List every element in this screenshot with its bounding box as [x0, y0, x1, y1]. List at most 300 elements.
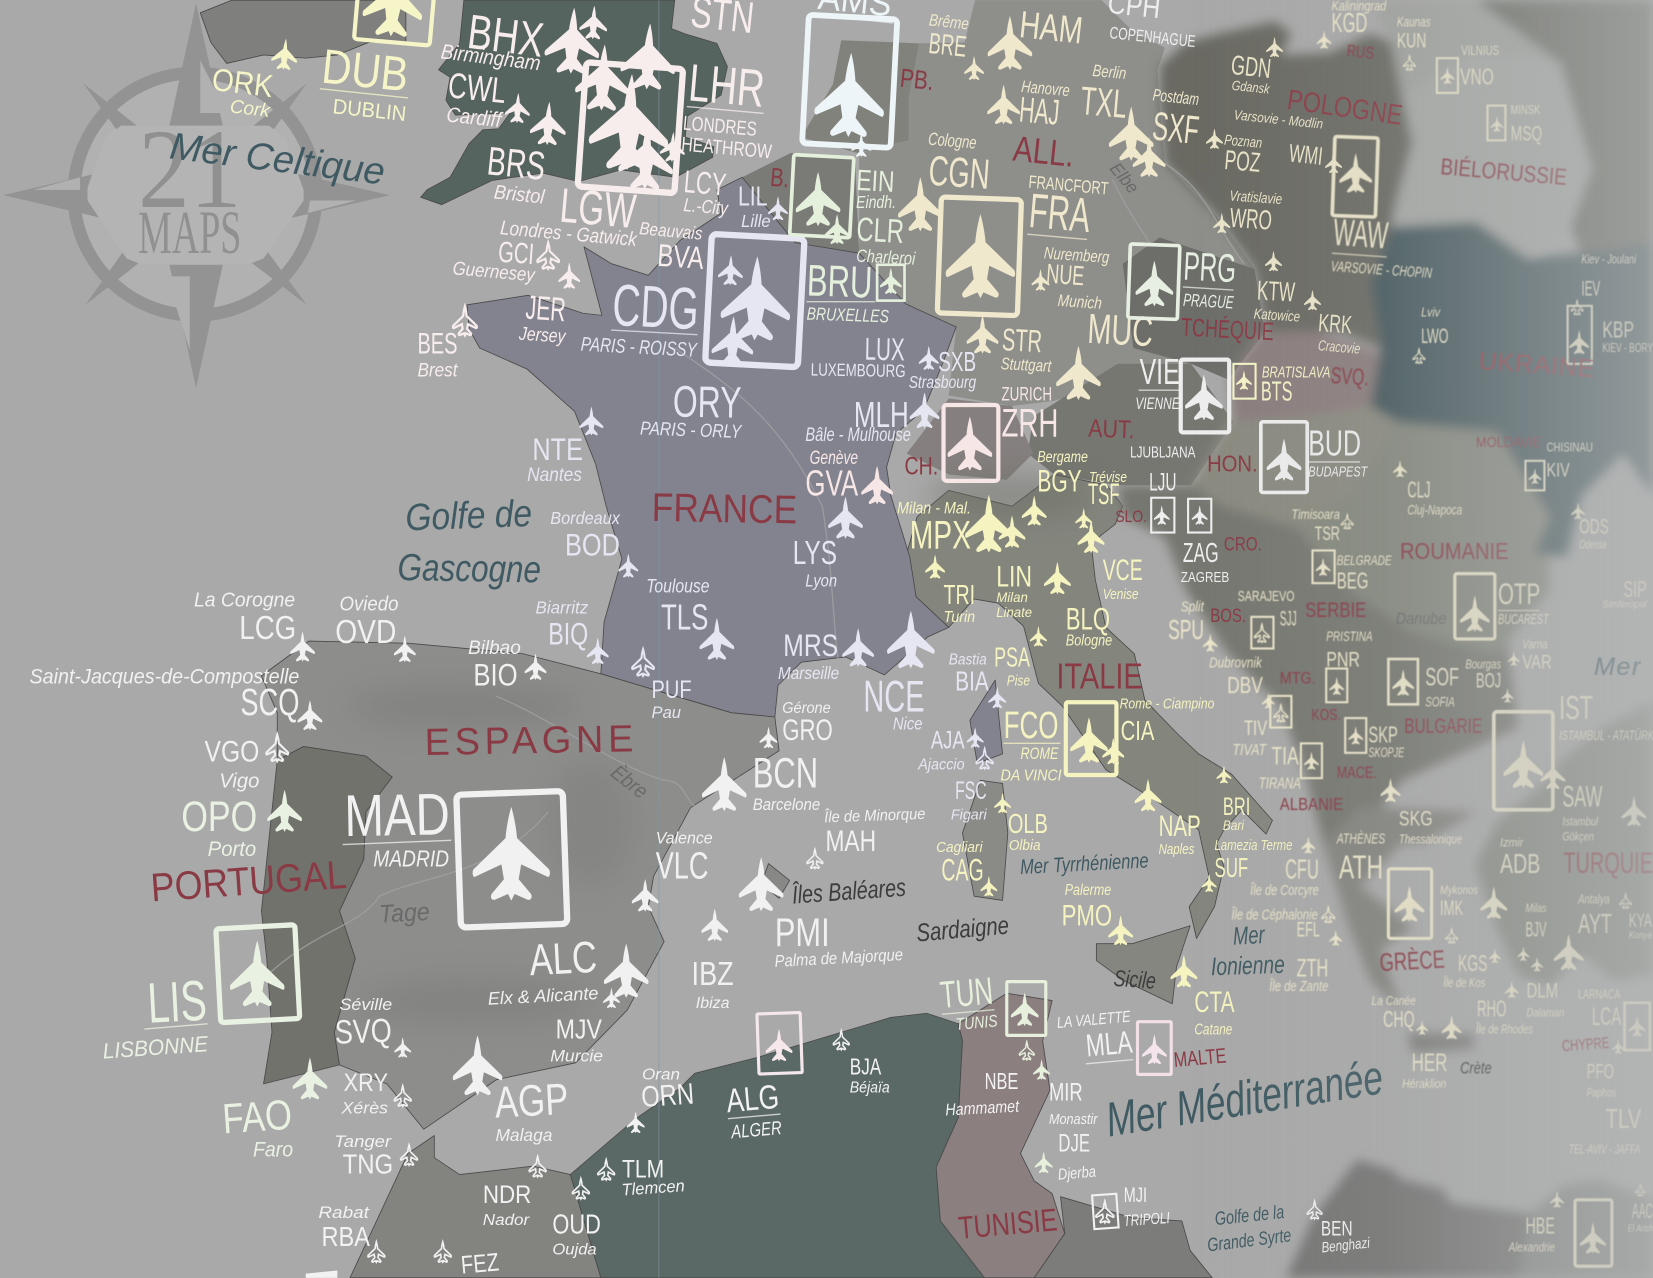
airports: Switzerland: ZRH: [1001, 402, 1058, 446]
airports: Switzerland: [805, 385, 1058, 504]
airports: North Africa: Oran: [642, 1067, 680, 1084]
airports: North Africa: Benghazi: [1321, 1235, 1371, 1257]
airports: North Africa: BJA: [850, 1053, 882, 1079]
airports: North Africa: Hammamet: [945, 1097, 1021, 1119]
airports: France: SXB: [938, 346, 976, 377]
airports: Ireland: [208, 0, 435, 126]
airports: Central Europe: [1128, 244, 1237, 319]
airports and countries: eastern Europe (hazy): Split: [1181, 600, 1205, 616]
airports: Spain and North-west: VLC: [656, 845, 708, 887]
airports: Spain and North-west: La Corogne: [194, 589, 295, 611]
airports: United Kingdom: Cardiff: [445, 103, 504, 132]
airports: Italy: Bologne: [1066, 632, 1112, 649]
airports: Spain and North-west: Xérès: [341, 1098, 389, 1117]
airports and countries: eastern Europe (hazy): TIVAT: [1232, 742, 1267, 759]
airports: France: LIL: [738, 181, 767, 212]
airports and countries: eastern Europe (hazy): SAW: [1562, 781, 1602, 814]
logo: 21 Maps compass: 21: [138, 106, 241, 232]
airports: Spain and North-west: BCN: [753, 750, 818, 797]
airports and countries: eastern Europe (hazy): ADB: [1500, 848, 1540, 879]
airports and countries: eastern Europe (hazy): VNO: [1460, 63, 1494, 89]
airports and countries: eastern Europe (hazy): Lviv: [1421, 305, 1441, 319]
airports and countries: eastern Europe (hazy): KBP: [1602, 316, 1634, 342]
airports: North Africa: ALG: [725, 1078, 781, 1120]
seas and geographic names: Elbe: [1106, 159, 1143, 197]
airports: Spain and North-west: Elx & Alicante: [487, 983, 599, 1009]
airports and countries: eastern Europe (hazy): Thessalonique: [1399, 833, 1462, 847]
airports: United Kingdom: BVA: [656, 237, 706, 276]
airports and countries: eastern Europe (hazy): SPU: [1168, 614, 1204, 645]
seas and geographic names: Gascogne: [397, 547, 541, 591]
airports: North Africa: Béjaïa: [850, 1079, 890, 1096]
airports: Tunisia: [939, 970, 1053, 1173]
airports: Spain and North-west: Malaga: [495, 1125, 552, 1145]
airports: United Kingdom: LGW: [558, 179, 638, 239]
airports: Poland: Varsovie - Modlin: [1233, 107, 1324, 132]
airports: France: Nantes: [527, 465, 582, 486]
airports: Italy: Milan: [996, 590, 1028, 605]
airports: United Kingdom: BRS: [485, 139, 547, 189]
airports and countries: eastern Europe (hazy): SJJ: [1280, 607, 1297, 630]
airports: Germany: Munich: [1057, 291, 1103, 313]
airports and countries: eastern Europe (hazy): WAW: [1332, 212, 1390, 258]
airports and countries: eastern Europe (hazy): RUS: [1346, 41, 1375, 63]
airports and countries: eastern Europe (hazy): KGS: [1458, 950, 1487, 976]
airports: France: MRS: [783, 627, 838, 663]
airports: Portugal: LISBONNE: [102, 1031, 209, 1064]
airports: Ireland: Cork: [229, 96, 273, 122]
airports: Italy: BRI: [1223, 793, 1250, 821]
rivers: [261, 164, 1244, 981]
seas and geographic names: Oder: [1191, 161, 1226, 201]
airports: Portugal: OPO: [181, 793, 257, 840]
airports: Italy: Pise: [1007, 673, 1030, 689]
airports: Germany: TXL: [1079, 79, 1129, 127]
airports: Italy: Cagliari: [936, 840, 983, 856]
airports: Germany: FRANCFORT: [1028, 172, 1109, 199]
airports: Ireland: DUB: [319, 40, 411, 102]
airports: Ireland: DUBLIN: [332, 95, 407, 126]
airports and countries: eastern Europe (hazy): BULGARIE: [1404, 715, 1482, 738]
airports: France: NTE: [532, 431, 583, 467]
logo: 21 Maps compass: [3, 3, 390, 388]
airports: France: Strasbourg: [909, 372, 976, 392]
airports and countries: eastern Europe (hazy): La Canée: [1372, 994, 1416, 1008]
country names: HON.: [1207, 450, 1258, 476]
airports: Benelux: EIN: [856, 164, 895, 199]
airports and countries: eastern Europe (hazy): KGD: [1331, 7, 1367, 38]
airports: Austria Hungary Slovenia Croatia: ZAGREB: [1181, 570, 1229, 586]
airports and countries: eastern Europe (hazy): SVQ.: [1330, 362, 1370, 390]
airports and countries: eastern Europe (hazy): Timisoara: [1291, 507, 1340, 522]
airports: Germany: [898, 4, 1201, 400]
airports: Poland: GDN: [1230, 49, 1273, 84]
airports: Italy: [897, 449, 1292, 1038]
airports: Ireland: ORK: [210, 61, 275, 104]
country names: ESPAGNE: [424, 718, 634, 764]
airports: North Africa: ALGER: [730, 1118, 783, 1143]
airports: Spain and North-west: BIO: [473, 656, 518, 692]
airports: Italy: CAG: [941, 851, 984, 887]
airports and countries: eastern Europe (hazy): Cluj-Napoca: [1407, 503, 1462, 518]
airports: France: FSC: [955, 777, 987, 805]
airports: Austria Hungary Slovenia Croatia: BUDAPEST: [1308, 465, 1368, 481]
airports: Channel Islands and Brittany: JER: [524, 289, 567, 329]
airports: United Kingdom: Bristol: [493, 181, 546, 209]
airports: Italy: Venise: [1103, 587, 1139, 603]
airports and countries: eastern Europe (hazy): ALBANIE: [1280, 794, 1343, 814]
airports: North Africa: Djerba: [1057, 1164, 1097, 1184]
airports: Spain and North-west: ALC: [528, 933, 598, 985]
country names: TCHÉQUIE: [1180, 312, 1275, 346]
country names: TUNISIE: [957, 1201, 1059, 1246]
airports and countries: eastern Europe (hazy): AYT: [1578, 908, 1612, 939]
airports: Spain and North-west: MADRID: [373, 846, 449, 872]
seas and geographic names: Èbre: [606, 761, 652, 804]
airports: France: PARIS - ORLY: [640, 418, 743, 443]
airports: France: Lyon: [805, 570, 837, 590]
seas and geographic names: Grande Syrte: [1206, 1225, 1292, 1256]
airports: France: PUF: [652, 676, 692, 704]
airports: France: MLH: [854, 395, 909, 435]
country names: ITALIE: [1056, 657, 1143, 697]
airports and countries: eastern Europe (hazy): GRÈCE: [1379, 945, 1446, 977]
airports: France: AJA: [931, 727, 965, 755]
airports and countries: eastern Europe (hazy): TIRANA: [1259, 776, 1301, 793]
airports: Spain and North-west: Vigo: [219, 771, 259, 793]
airports and countries: eastern Europe (hazy): Simferopol: [1602, 598, 1647, 610]
airports and countries: eastern Europe (hazy): SOFIA: [1425, 694, 1455, 709]
airports: Spain and North-west: AGP: [493, 1075, 570, 1128]
country names: ALL.: [1011, 129, 1076, 175]
airports: Spain and North-west: Ibiza: [696, 995, 730, 1012]
airports: Channel Islands and Brittany: Guernesey: [452, 258, 537, 287]
airports: United Kingdom: Beauvais: [639, 218, 703, 244]
airports: France: BIQ: [548, 615, 588, 651]
country names: CH.: [905, 453, 938, 481]
airports and countries: eastern Europe (hazy): TLV: [1606, 1103, 1642, 1134]
airports: Germany: HAM: [1017, 4, 1085, 53]
seas and geographic names: Tage: [378, 898, 430, 929]
airports: Spain and North-west: Bilbao: [468, 638, 521, 659]
airports: Spain and North-west: SCQ: [240, 682, 299, 724]
airports: Germany: HAJ: [1018, 90, 1061, 133]
airports: Italy: TSF: [1088, 478, 1120, 511]
airports: Italy: Rome - Ciampino: [1120, 697, 1214, 713]
airports: Spain and North-west: OVD: [335, 613, 396, 651]
airports: North Africa: Oujda: [552, 1242, 597, 1259]
airports: Portugal: Porto: [208, 838, 256, 861]
airports and countries: eastern Europe (hazy): LARNACA: [1578, 987, 1621, 1001]
airports and countries: eastern Europe (hazy): BEG: [1337, 567, 1368, 593]
airports: Italy: Milan - Mal.: [897, 499, 971, 518]
airports and countries: eastern Europe (hazy): Île de Kos: [1443, 975, 1486, 990]
airports: Central Europe: PRAGUE: [1183, 290, 1235, 313]
relief shading: [348, 472, 1096, 1025]
seas and geographic names: Sardaigne: [915, 912, 1010, 948]
airports: Spain and North-west: SVQ: [334, 1012, 392, 1052]
airports: North Africa: Rabat: [318, 1203, 370, 1222]
airports: Italy: OLB: [1008, 808, 1048, 839]
seas and geographic names: Sicile: [1113, 965, 1157, 994]
airports: Spain and North-west: MAD: [344, 781, 450, 849]
airports: Spain and North-west: [30, 589, 926, 1145]
print seam: [658, 0, 660, 1278]
airports: Benelux: BRUXELLES: [806, 304, 889, 326]
airports and countries: eastern Europe (hazy): CFU: [1285, 853, 1319, 884]
airports and countries: eastern Europe (hazy): Dubrovnik: [1209, 655, 1262, 671]
airports: Poland: Gdansk: [1231, 78, 1271, 97]
airports: Spain and North-west: LCG: [239, 609, 296, 647]
airports: Benelux: [790, 155, 917, 326]
airports: Germany: NUE: [1045, 258, 1085, 291]
airports: Portugal: LIS: [146, 969, 208, 1036]
airports: Austria Hungary Slovenia Croatia: LJUBLJANA: [1130, 445, 1196, 462]
airports: France: TLS: [661, 598, 708, 638]
airports and countries: eastern Europe (hazy): EFL: [1297, 918, 1320, 941]
airports: North Africa: MJI: [1124, 1184, 1147, 1207]
airports and countries: eastern Europe (hazy): TSR: [1315, 524, 1340, 545]
airports: Spain and North-west: Murcie: [550, 1047, 603, 1066]
country names: [149, 63, 1275, 1246]
airports: Central Europe: PRG: [1182, 245, 1237, 291]
airports: North Africa: NBE: [985, 1068, 1018, 1094]
airports and countries: eastern Europe (hazy): HER: [1412, 1049, 1447, 1077]
airports: United Kingdom: L.-City: [683, 195, 730, 220]
airports: Germany: FRA: [1027, 184, 1093, 243]
airports and countries: eastern Europe (hazy): Île de Rhodes: [1476, 1021, 1533, 1036]
airports: United Kingdom: Birmingham: [440, 40, 542, 75]
airports: Italy: Lamezia Terme: [1214, 838, 1292, 854]
airports: Poland: KRK: [1317, 309, 1353, 340]
airports and countries: eastern Europe (hazy): LCA: [1592, 1003, 1621, 1031]
airports: Channel Islands and Brittany: Jersey: [517, 324, 567, 348]
country names: AUT.: [1088, 415, 1135, 444]
country names: PORTUGAL: [149, 853, 348, 910]
airports and countries: eastern Europe (hazy): KIV: [1547, 461, 1570, 482]
airports: Benelux: BRU: [806, 256, 873, 308]
airports and countries: eastern Europe (hazy): CHQ: [1383, 1006, 1415, 1032]
airports: United Kingdom: BHX: [465, 5, 547, 68]
airports: Austria Hungary Slovenia Croatia: VIE: [1140, 352, 1180, 392]
airports: France: Bastia: [949, 651, 987, 668]
airports: Germany: BRE: [927, 27, 968, 64]
airports and countries: eastern Europe (hazy): VAR: [1522, 653, 1552, 674]
airports: France: LYS: [793, 534, 837, 572]
airports: North Africa: Nador: [483, 1212, 530, 1229]
airports: United Kingdom: HEATHROW: [680, 134, 773, 163]
airports: Italy: TRI: [944, 579, 975, 610]
airports: Italy: SUF: [1214, 852, 1248, 883]
airports: France: Bordeaux: [550, 508, 621, 528]
airports and countries: eastern Europe (hazy): Antalya: [1577, 893, 1610, 907]
airports and countries: eastern Europe (hazy): PFO: [1587, 1061, 1614, 1084]
airports and countries: eastern Europe (hazy): VILNIUS: [1461, 43, 1499, 58]
airports: United Kingdom: [440, 0, 780, 276]
airports and countries: eastern Europe (hazy): PRISTINA: [1326, 629, 1373, 644]
airports: Spain and North-west: IBZ: [692, 955, 734, 993]
airports and countries: eastern Europe (hazy): Héraklion: [1402, 1077, 1446, 1091]
airports: Germany: MUC: [1086, 305, 1154, 355]
airports: Italy: PSA: [994, 641, 1030, 672]
airports: Poland: Poznan: [1224, 133, 1263, 152]
airports: North Africa: MLA: [1084, 1023, 1134, 1063]
airports: Poland: Vratislavie: [1229, 188, 1283, 208]
airports: Italy: NAP: [1159, 810, 1201, 843]
airports: North Africa: TLM: [622, 1156, 664, 1184]
airports: Poland: KTW: [1256, 275, 1296, 308]
airports and countries: eastern Europe (hazy): OTP: [1498, 578, 1540, 611]
airports: North Africa: Monastir: [1049, 1112, 1098, 1128]
airports and countries: eastern Europe (hazy): ODS: [1579, 516, 1609, 539]
airports and countries: eastern Europe (hazy): Varna: [1522, 637, 1548, 651]
airports and countries: eastern Europe (hazy): BJV: [1525, 918, 1547, 941]
airports and countries: eastern Europe (hazy): Odessa: [1579, 539, 1607, 551]
airports and countries: eastern Europe (hazy): BOJ: [1476, 669, 1501, 692]
airports: Germany: CGN: [927, 147, 991, 198]
airports: Spain and North-west: Séville: [339, 995, 392, 1014]
land masses: east (hazy): [1117, 0, 1653, 1278]
airports: France: Marseille: [778, 663, 839, 683]
airports and countries: eastern Europe (hazy): MTG.: [1280, 668, 1316, 687]
airports and countries: eastern Europe (hazy): TIA: [1271, 742, 1299, 770]
airports and countries: eastern Europe (hazy): SARAJEVO: [1238, 589, 1295, 605]
airports: Italy: DA VINCI: [1000, 767, 1062, 784]
airports: Italy: Naples: [1159, 842, 1195, 858]
airports: Channel Islands and Brittany: [417, 236, 580, 382]
airports: North Africa: Tlemcen: [621, 1176, 685, 1200]
airports: Italy: MPX: [910, 513, 971, 557]
airports: North Africa: TRIPOLI: [1123, 1210, 1171, 1230]
airports: Spain and North-west: PMI: [775, 911, 830, 955]
airports and countries: eastern Europe (hazy): Izmir: [1500, 838, 1524, 850]
country names: MALTE: [1173, 1044, 1227, 1072]
airports: Italy: Linate: [996, 605, 1032, 620]
airports: Italy: CIA: [1121, 715, 1155, 746]
airports: Benelux: CLR: [856, 211, 905, 251]
airports and countries: eastern Europe (hazy): MACE.: [1337, 763, 1377, 782]
airports: France: LUX: [864, 331, 905, 367]
airports: France: Figari: [951, 807, 987, 823]
airports: Italy: PMO: [1062, 900, 1112, 933]
airports: North Africa: RBA: [322, 1221, 371, 1252]
airports: France: LUXEMBOURG: [811, 359, 906, 381]
airports and countries: eastern Europe (hazy): CHYPRE: [1561, 1035, 1610, 1055]
airports: North Africa: MIR: [1049, 1079, 1083, 1107]
country names: BOS.: [1210, 606, 1246, 627]
airports and countries: eastern Europe (hazy): SKOPJE: [1368, 745, 1405, 760]
seas and geographic names: Mer: [1232, 921, 1266, 951]
airports: United Kingdom: Londres - Gatwick: [499, 217, 639, 251]
airports: Italy: Catane: [1194, 1021, 1233, 1038]
airports: Channel Islands and Brittany: Brest: [417, 361, 458, 382]
airports: Poland: [1206, 37, 1361, 358]
airports: Spain and North-west: Barcelone: [753, 795, 820, 814]
country names: CRO.: [1224, 534, 1262, 555]
airports: Italy: VCE: [1103, 554, 1143, 587]
airports: North Africa: TNG: [343, 1148, 393, 1179]
seas and geographic names: Mer Celtique: [168, 126, 387, 194]
airports: Germany: SXF: [1150, 104, 1201, 153]
airports: Poland: POZ: [1223, 144, 1262, 178]
airports: United Kingdom: CWL: [446, 65, 508, 111]
airports and countries: eastern Europe (hazy): SOF: [1425, 663, 1459, 691]
airports: Austria Hungary Slovenia Croatia: ZAG: [1183, 537, 1219, 568]
airports and countries: eastern Europe (hazy): MOLDAVIE: [1476, 435, 1541, 451]
airports: Slovakia: [1233, 364, 1330, 407]
country name: Pologne: POLOGNE: [1285, 84, 1404, 132]
airports: France: CDG: [611, 272, 701, 342]
airports: France: Pau: [652, 703, 682, 722]
airports and countries: eastern Europe (hazy): Istambul: [1562, 817, 1599, 829]
airports: France: Nice: [893, 714, 922, 734]
airports: Portugal: [102, 790, 327, 1162]
airports: Slovakia: BTS: [1261, 376, 1292, 407]
airports: North Africa: ORN: [640, 1077, 695, 1114]
airports and countries: eastern Europe (hazy): VARSOVIE - CHOPIN: [1330, 259, 1433, 282]
airports and countries: eastern Europe (hazy): Kaunas: [1397, 15, 1431, 30]
airports: Italy: ROME: [1020, 744, 1059, 763]
seas and geographic names: [168, 126, 1387, 1256]
airports: France: BOD: [565, 527, 620, 563]
airports and countries: eastern Europe (hazy): SKP: [1368, 721, 1398, 747]
airports and countries: eastern Europe (hazy): BIÉLORUSSIE: [1440, 153, 1568, 190]
airports and countries: eastern Europe (hazy): TIV: [1244, 717, 1267, 740]
airports: Portugal: FAO: [221, 1091, 294, 1142]
country names: B.: [769, 162, 791, 193]
airports: Austria Hungary Slovenia Croatia: VIENNE: [1135, 394, 1180, 413]
airports: Poland: WRO: [1229, 202, 1273, 236]
airports and countries: eastern Europe (hazy): ATHÈNES: [1336, 831, 1385, 848]
airports: France: Toulouse: [646, 577, 709, 598]
airports and countries: eastern Europe (hazy): SKG: [1399, 808, 1433, 831]
airports and countries: eastern Europe (hazy): Crète: [1460, 1058, 1492, 1077]
airports: Switzerland: ZURICH: [1001, 385, 1052, 406]
airports and countries: eastern Europe (hazy): ATH: [1339, 848, 1383, 886]
airports: Spain and North-west: MJV: [556, 1014, 603, 1045]
airports and countries: eastern Europe (hazy): Île de Céphalonie: [1231, 906, 1318, 923]
airports: North Africa: Tanger: [334, 1132, 393, 1151]
airports: Spain and North-west: Saint-Jacques-de-Compostelle: [30, 665, 299, 688]
seas and geographic names: Golfe de la: [1214, 1202, 1285, 1230]
airports and countries: eastern Europe (hazy): ROUMANIE: [1400, 538, 1509, 564]
country names: SLO.: [1115, 507, 1147, 526]
airports and countries: eastern Europe (hazy): Paphos: [1587, 1088, 1616, 1100]
airports and countries: eastern Europe (hazy): PNR: [1326, 648, 1360, 671]
airports: Germany: Nuremberg: [1043, 243, 1110, 267]
airports: North Africa: BEN: [1321, 1218, 1353, 1241]
eastern haze overlay: [1191, 0, 1653, 1278]
airports: North Africa: [306, 1009, 1371, 1278]
airports and countries: eastern Europe (hazy): SERBIE: [1305, 599, 1366, 622]
airports: Spain and North-west: Palma de Majorque: [774, 945, 903, 971]
airports: France: BIA: [955, 666, 989, 697]
airports: Italy: BLQ: [1066, 601, 1110, 637]
airports and countries: eastern Europe (hazy): IST: [1559, 689, 1593, 727]
land masses: west: [200, 0, 1272, 1278]
airports: Italy: Bergame: [1037, 449, 1088, 466]
airports: France: [527, 181, 1006, 823]
airports: United Kingdom: LONDRES: [682, 113, 758, 141]
airports: Austria Hungary Slovenia Croatia: [1130, 352, 1368, 586]
airports: Benelux: Charleroi: [856, 246, 917, 269]
seas and geographic names: Mer Tyrrhénienne: [1020, 849, 1149, 879]
country names: FRANCE: [651, 486, 798, 532]
airports: Germany: Stuttgart: [1000, 354, 1053, 376]
airports: Germany: Berlin: [1092, 61, 1127, 83]
airports and countries: eastern Europe (hazy): BELGRADE: [1337, 553, 1392, 568]
airports: Spain and North-west: GRO: [782, 714, 833, 747]
